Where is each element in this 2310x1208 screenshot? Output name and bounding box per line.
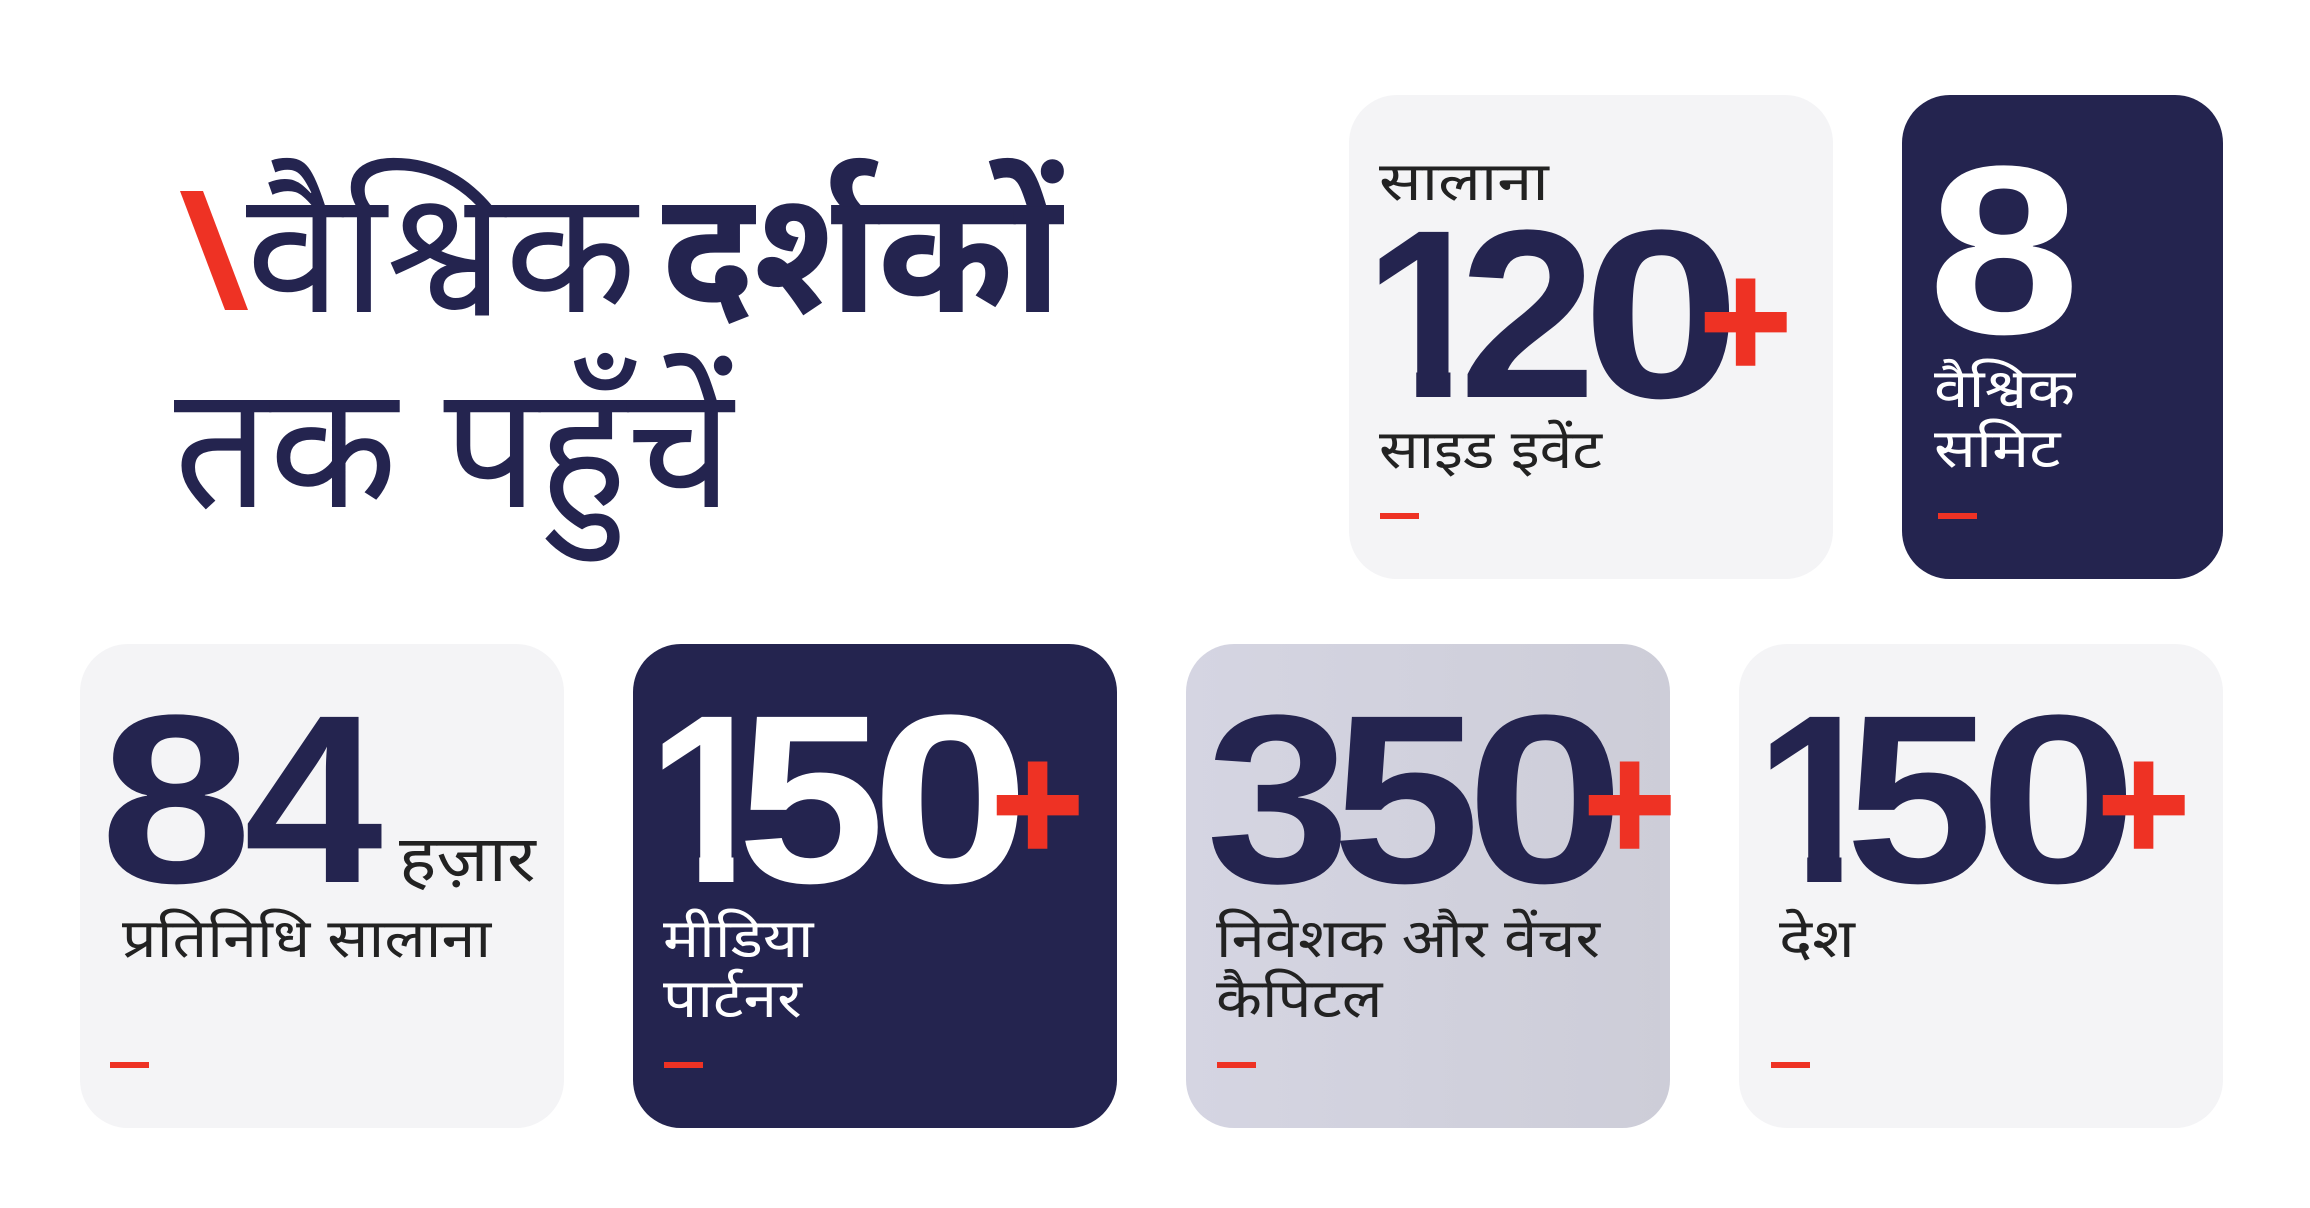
number: 350: 5 (1332, 665, 1480, 933)
title line 1: bold: दर्शकों (662, 157, 1062, 349)
number: 120 (1380, 180, 1741, 448)
label: annual: सालाना (1379, 152, 1549, 212)
number: 8: 8 (1928, 116, 2080, 384)
label: investors and venture capital: कैपिटल (1216, 969, 1382, 1029)
number: 150 (1770, 665, 2138, 933)
number: 150: 5 (1845, 665, 1993, 933)
plus sign: + (1699, 226, 1792, 414)
accent dash (1938, 513, 1977, 519)
plus sign: + (2097, 709, 2190, 897)
label: media partners: मीडिया (663, 909, 814, 969)
accent dash (1217, 1062, 1256, 1068)
label: delegates annually: प्रतिनिधि सालाना (122, 909, 491, 969)
number: 150: 0 (871, 665, 1030, 933)
accent dash (1771, 1062, 1810, 1068)
label: global summits: वैश्विक (1934, 359, 2075, 419)
label: countries: देश (1779, 909, 1855, 969)
label: investors and venture capital (1216, 908, 1601, 1029)
number: 350: 0 (1466, 665, 1624, 933)
number: 84 (100, 665, 383, 933)
panel: countries (1739, 644, 2223, 1128)
number: 120: 0 (1582, 180, 1741, 448)
number: 150: 5 (737, 665, 885, 933)
panel: global summits (1902, 95, 2223, 579)
label: global summits (1934, 358, 2076, 479)
panel: media partners (633, 644, 1117, 1128)
title line 1: regular: वैश्विक (246, 157, 637, 349)
number: 150 (662, 665, 1030, 933)
number: 150: 1 (1755, 665, 1882, 933)
title (174, 157, 1064, 562)
title line 2: तक पहुँचें (174, 352, 733, 544)
label: media partners: पार्टनर (663, 969, 802, 1029)
label: investors and venture capital: निवेशक और वेंचर (1216, 909, 1600, 969)
number: 150: 1 (647, 665, 774, 933)
number: 150: 0 (1979, 665, 2138, 933)
panel: investors and venture capital (1186, 644, 1670, 1128)
accent dash (110, 1062, 149, 1068)
icon: red slash (180, 191, 248, 310)
accent dash (1380, 513, 1419, 519)
number: 350 (1206, 665, 1624, 933)
panel: delegates (80, 644, 564, 1128)
accent dash (664, 1062, 703, 1068)
number: 120: 1 (1364, 180, 1491, 448)
label: global summits: समिट (1934, 419, 2060, 479)
label: media partners (663, 908, 814, 1029)
unit: thousand: हज़ार (399, 823, 536, 895)
plus sign: + (991, 709, 1084, 897)
number: 350: 3 (1206, 665, 1350, 933)
number: 84: 8 (100, 665, 252, 933)
panel: side events (1349, 95, 1833, 579)
label: side events: साइड इवेंट (1379, 420, 1602, 480)
plus sign: + (1583, 709, 1676, 897)
number: 120: 2 (1458, 180, 1596, 448)
number: 84: 4 (244, 665, 383, 933)
